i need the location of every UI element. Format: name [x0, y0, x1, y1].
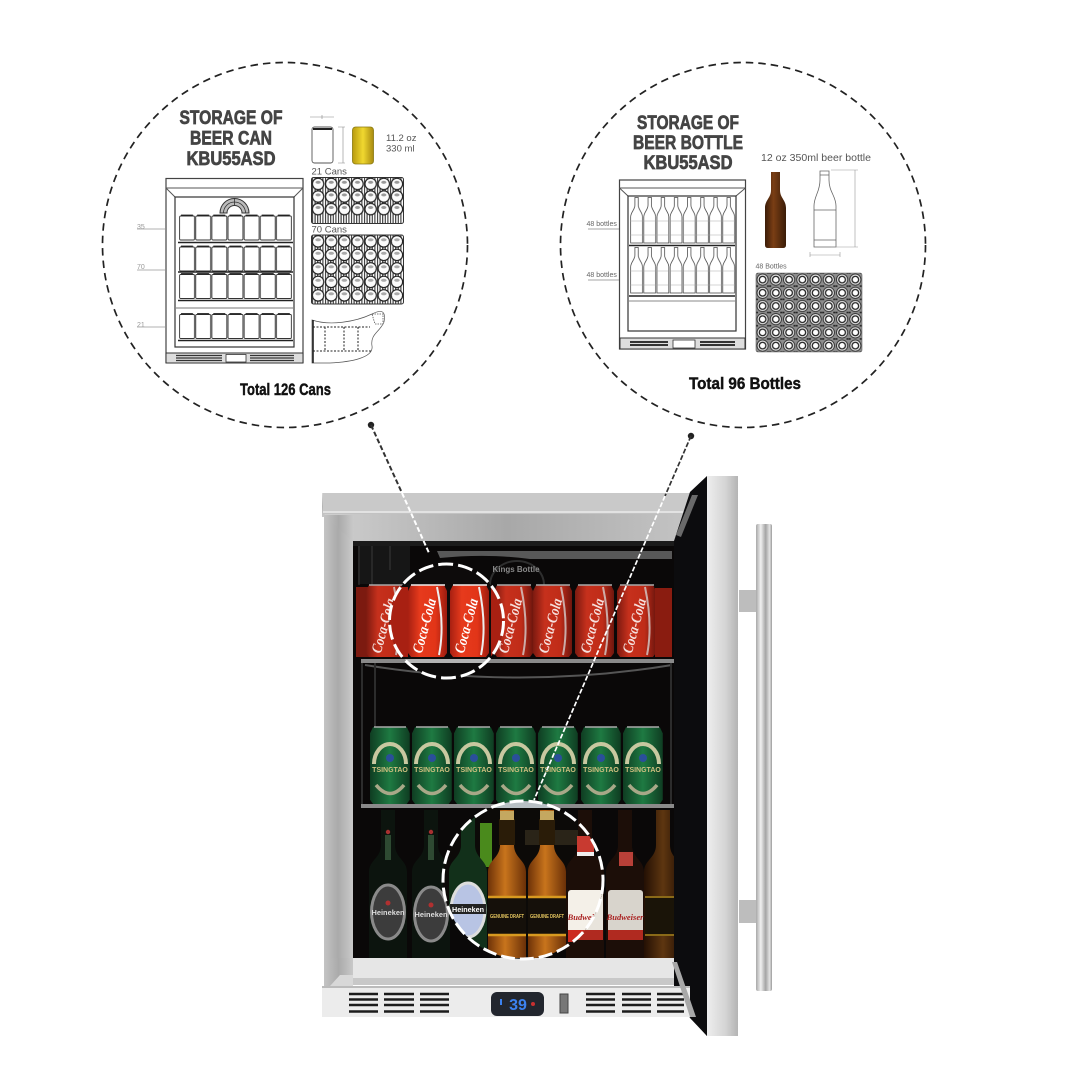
- icon: bottle outline with dimensions: [810, 170, 858, 257]
- grid: 21 cans top view: [312, 178, 404, 224]
- control panel: [322, 986, 690, 1017]
- fridge handle: [739, 524, 772, 991]
- highlighted cola cans: Coca-Cola: [410, 596, 440, 655]
- labels: shelf capacity numbers: 35: [137, 224, 145, 231]
- text: bottle volume: 12 oz 350ml beer bottle: [761, 152, 871, 164]
- text: 70 cans: 70 Cans: [312, 224, 347, 236]
- row of green beer cans: TSINGTAO: [498, 767, 534, 774]
- power switch: [560, 994, 568, 1013]
- door stainless edge: [707, 476, 738, 1036]
- text: can volume: 11.2 oz: [386, 133, 417, 144]
- drawing: can loading detail: [312, 311, 384, 363]
- labels: bottles per shelf: 48 bottles: [586, 221, 617, 228]
- heading: storage of beer can: STORAGE OF: [180, 108, 282, 129]
- row of green beer cans: TSINGTAO: [414, 767, 450, 774]
- wire shelf 1: [361, 659, 674, 805]
- panel: storage of beer bottle: [560, 62, 926, 428]
- vents: [349, 994, 684, 1012]
- dashed circle: bottle highlight: [443, 801, 603, 959]
- heading: storage of beer bottle: [633, 113, 743, 174]
- row of bottles: [369, 810, 682, 958]
- total: 126 cans: Total 126 Cans: [240, 380, 331, 399]
- wire shelf 2: [361, 804, 674, 808]
- heading: storage of beer bottle: BEER BOTTLE: [633, 133, 743, 154]
- heading: storage of beer bottle: STORAGE OF: [637, 113, 739, 134]
- row of cola cans: Coca-Cola: [536, 596, 566, 655]
- row of cola cans: Coca-Cola: [620, 596, 650, 655]
- row of bottles: Heineken: [372, 908, 405, 917]
- door hinge strip: [672, 962, 696, 1017]
- row of green beer cans: TSINGTAO: [583, 767, 619, 774]
- temperature display: 39: [509, 997, 527, 1014]
- highlighted beer bottles: Heineken: [452, 905, 484, 914]
- icon: can outline with dimensions: [310, 115, 345, 163]
- total: 96 bottles: Total 96 Bottles: [689, 374, 801, 393]
- labels: bottles per shelf: 48 bottles: [586, 272, 617, 279]
- row of green beer cans: TSINGTAO: [625, 767, 661, 774]
- grid: bottles top view: [756, 273, 862, 352]
- text: can volume: [386, 133, 417, 154]
- door lower corner: [690, 1017, 707, 1036]
- panel: storage of beer can: [102, 62, 468, 428]
- text: can volume: 330 ml: [386, 144, 415, 154]
- temperature display: [491, 992, 544, 1016]
- grid: 70 cans top view: [312, 235, 404, 304]
- heading: storage of beer can: KBU55ASD: [186, 149, 276, 170]
- row of cola cans: Coca-Cola: [496, 596, 526, 655]
- row of green beer cans: TSINGTAO: [372, 767, 408, 774]
- row of cola cans: Coca-Cola: [369, 596, 399, 655]
- highlighted beer bottles: Budweiser: [567, 912, 605, 922]
- highlighted beer bottles: GENUINE DRAFT: [530, 914, 564, 920]
- door reflection strip: [676, 495, 698, 537]
- row of bottles: Heineken: [414, 910, 448, 919]
- leader: bottles callout to bottle highlight: [534, 433, 694, 800]
- fridge interior: [353, 541, 682, 958]
- leader: cans callout to cola highlight: [368, 422, 429, 553]
- icon: yellow can: [352, 127, 374, 164]
- row of green beer cans: [370, 727, 663, 804]
- fridge line drawing: can layout: [166, 178, 303, 363]
- labels: shelf capacity numbers: [137, 224, 165, 329]
- highlighted cola cans: [390, 580, 504, 676]
- heading: storage of beer bottle: KBU55ASD: [644, 153, 732, 174]
- highlighted beer bottles: GENUINE DRAFT: [490, 914, 524, 920]
- labels: bottles per shelf: [586, 221, 619, 280]
- dashed circle: beer bottle callout: [560, 62, 926, 428]
- row of bottles: Budweiser: [606, 912, 644, 922]
- product photo: beverage fridge: [322, 476, 772, 1036]
- dashed circle: cola highlight: [390, 564, 504, 678]
- infographic: [102, 62, 926, 1036]
- row of green beer cans: TSINGTAO: [456, 767, 492, 774]
- text: brand badge: Kings Bottle: [492, 565, 540, 574]
- icon: amber bottle: [765, 172, 786, 248]
- heading: storage of beer can: BEER CAN: [190, 128, 272, 150]
- dashed circle: beer can callout: [102, 62, 468, 428]
- fridge line drawing: bottle layout: [620, 180, 746, 349]
- row of green beer cans: TSINGTAO: [540, 767, 576, 774]
- text: 21 cans: 21 Cans: [312, 166, 347, 178]
- glass door edge: [674, 476, 707, 1036]
- highlighted cola cans: Coca-Cola: [452, 596, 482, 655]
- heading: storage of beer can: [180, 108, 282, 170]
- highlighted beer bottles: [442, 800, 605, 960]
- labels: shelf capacity numbers: 21: [137, 322, 145, 329]
- labels: shelf capacity numbers: 70: [137, 264, 145, 271]
- row of cola cans: [356, 585, 672, 657]
- text: 48 bottles: 48 Bottles: [756, 264, 787, 270]
- row of cola cans: Coca-Cola: [578, 596, 608, 655]
- stainless cabinet frame: [322, 493, 691, 990]
